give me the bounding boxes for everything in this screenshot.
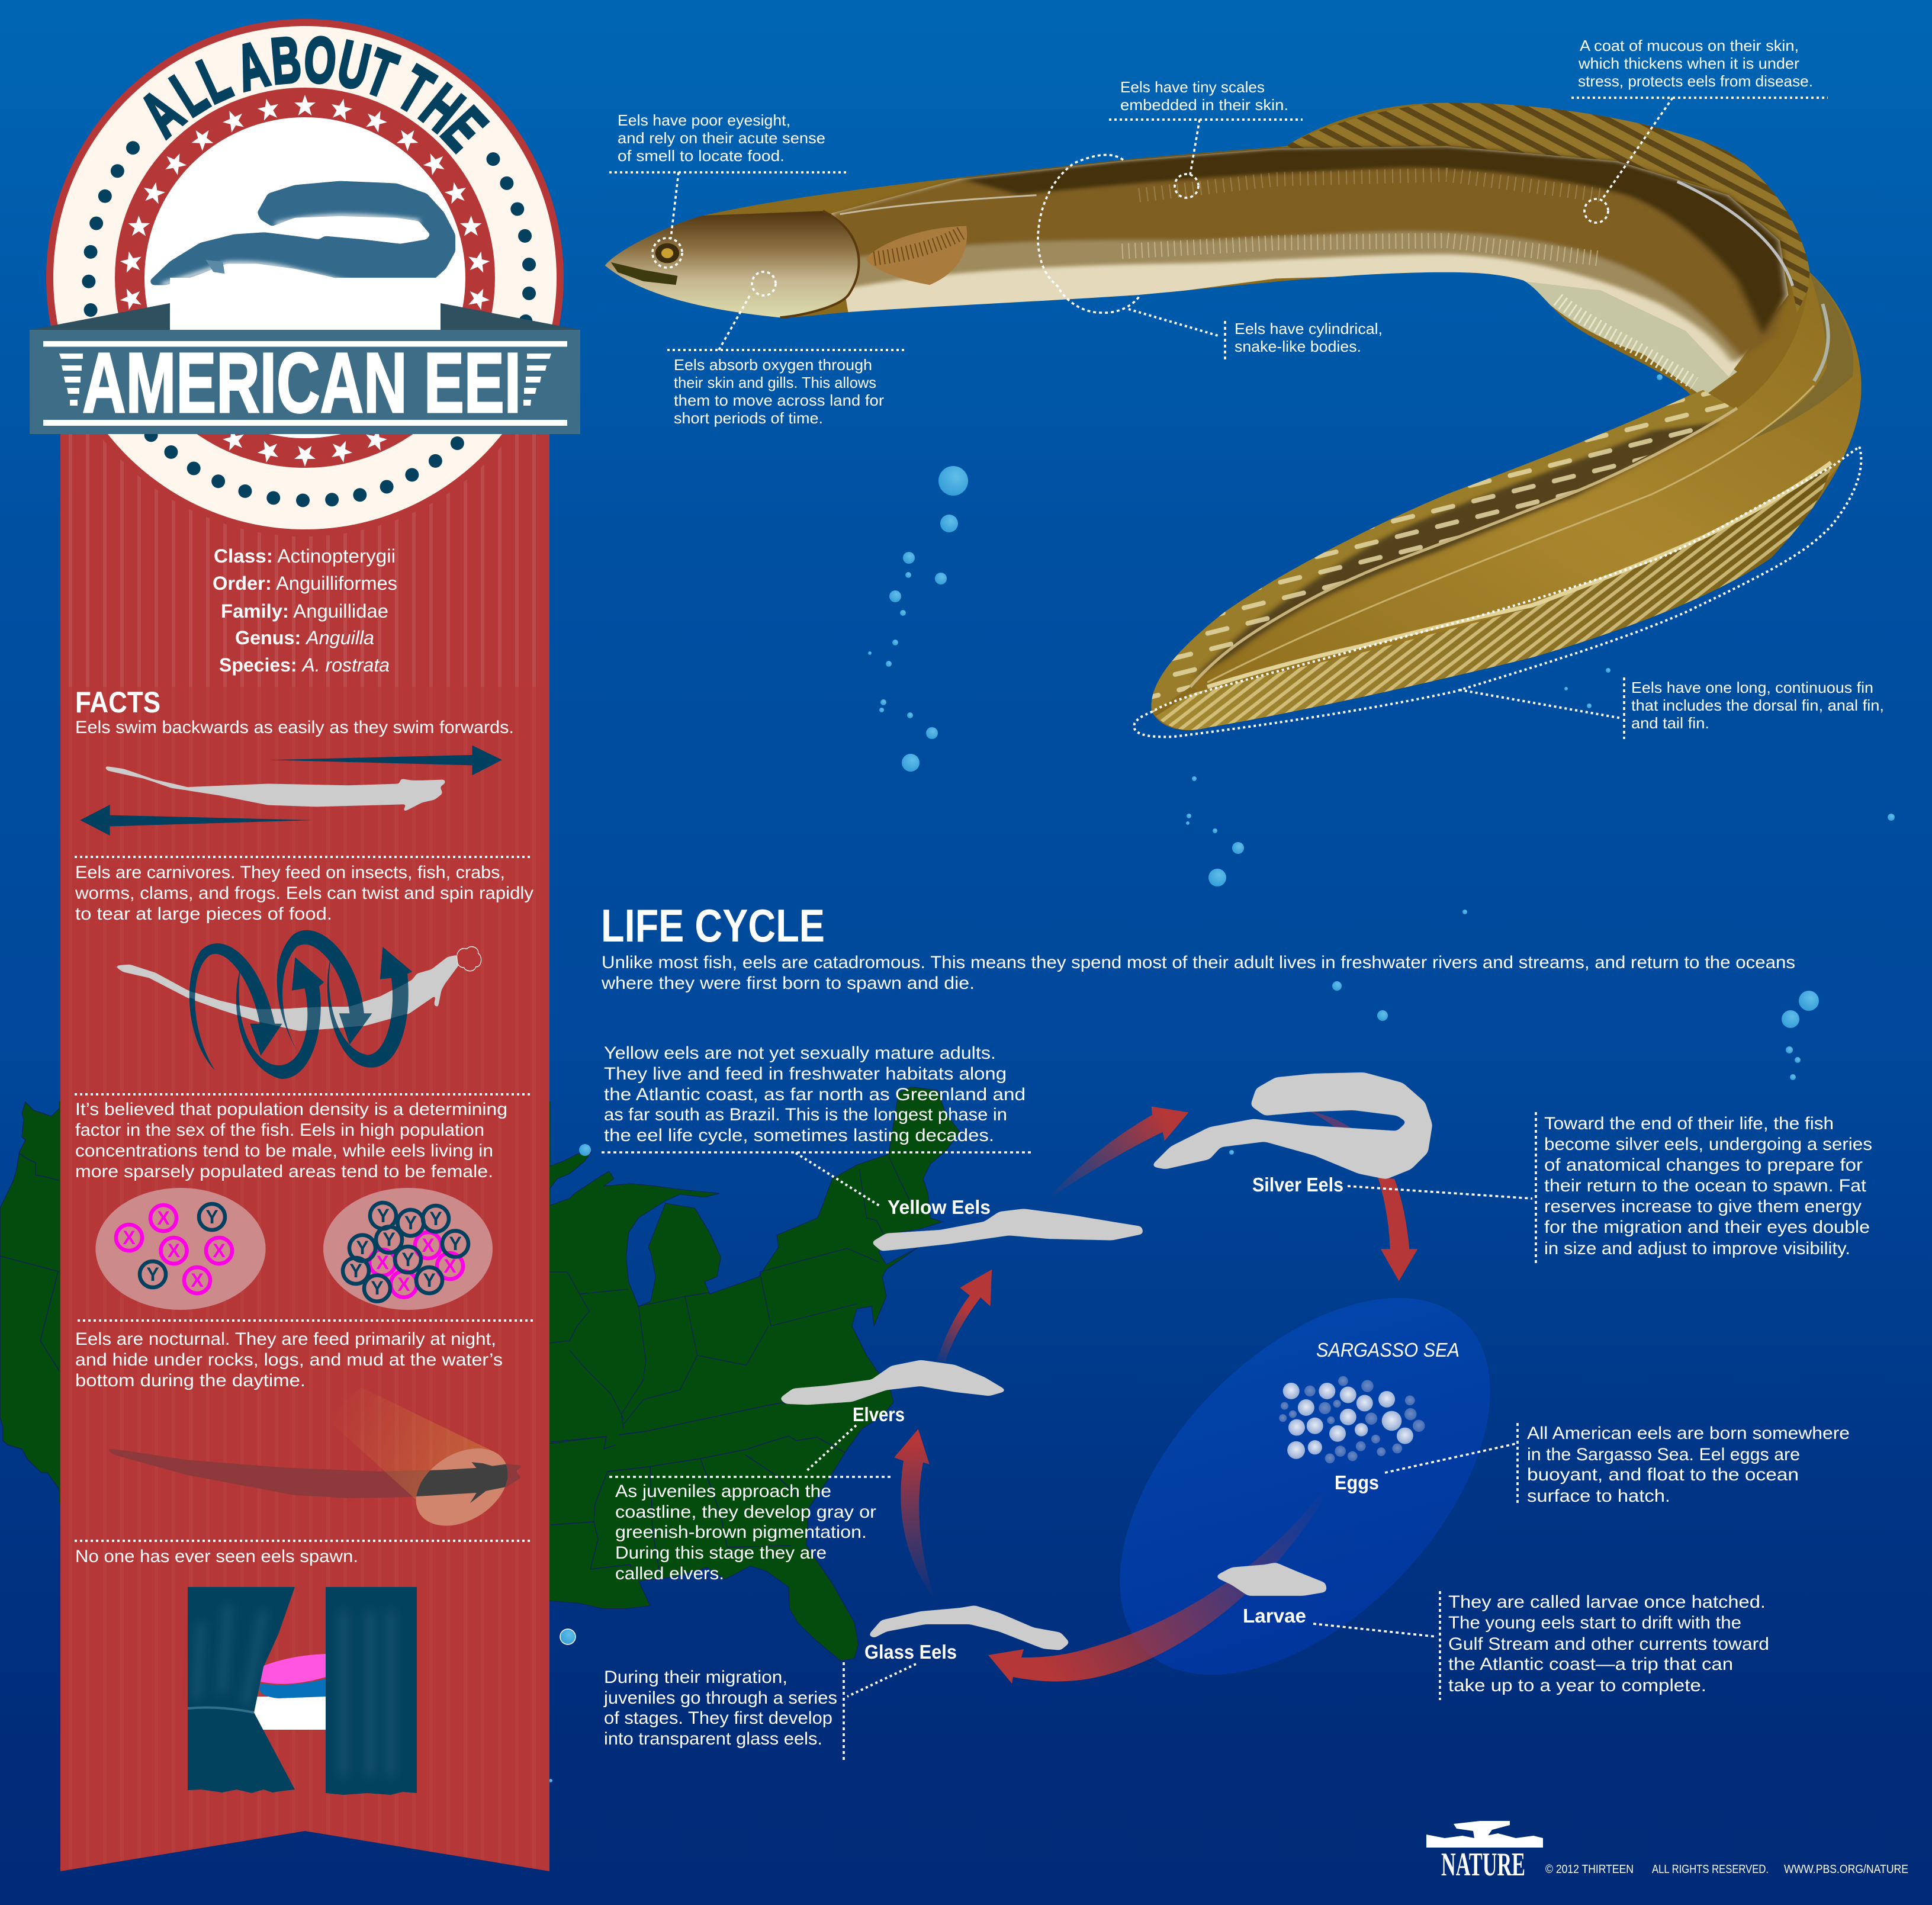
fact 3 chart: high density population: Y xyxy=(349,1260,362,1281)
fact 3 chart: low density population: X xyxy=(191,1270,204,1291)
stage note: silver eels: of anatomical changes to prepare for xyxy=(1544,1155,1863,1175)
taxonomy list: Order: Anguilliformes xyxy=(213,573,397,594)
callout: eyesight: Eels have poor eyesight, xyxy=(618,111,790,129)
stage note: elvers: Elvers xyxy=(853,1403,905,1425)
life cycle intro: Unlike most fish, eels are catadromous. This means they spend most of their adult lives in freshwater rivers and streams, and return to the oceans xyxy=(602,953,1795,972)
stage note: larvae: Gulf Stream and other currents toward xyxy=(1448,1634,1769,1654)
callout: mucous: stress, protects eels from disease. xyxy=(1578,72,1813,90)
title arc: all about the: T xyxy=(357,36,406,112)
fact 5 illustration: curtains hiding spawning eels xyxy=(188,1587,417,1795)
title arc: all about the: T xyxy=(387,53,444,127)
fact 2 text xyxy=(75,863,533,924)
silver eel and larvae silhouettes xyxy=(1152,1073,1432,1595)
fact 3 chart: high density population: X xyxy=(443,1255,457,1277)
dot ring xyxy=(82,141,536,507)
callout: cylindrical body xyxy=(1038,155,1383,361)
title arc: all about the: A xyxy=(229,28,275,105)
callout: eyesight: of smell to locate food. xyxy=(618,147,785,165)
stage note: yellow eels xyxy=(602,1043,1033,1218)
stage note: eggs: in the Sargasso Sea. Eel eggs are xyxy=(1527,1445,1800,1464)
fact 3 chart: high density population: Y xyxy=(371,1277,384,1299)
fact 3 chart: low density population: X xyxy=(157,1207,170,1229)
callout: oxygen: short periods of time. xyxy=(674,409,823,427)
taxonomy list: Genus: Anguilla xyxy=(235,627,374,648)
stage note: larvae: They are called larvae once hatched. xyxy=(1448,1592,1766,1612)
stage note: silver eels: become silver eels, undergoing a series xyxy=(1544,1135,1872,1154)
stage note: larvae: The young eels start to drift with the xyxy=(1448,1613,1741,1633)
callout: oxygen: them to move across land for xyxy=(674,391,884,409)
stage note: eggs: All American eels are born somewhere xyxy=(1527,1424,1850,1443)
title arc: all about the: A xyxy=(128,77,197,150)
stage note: larvae: take up to a year to complete. xyxy=(1448,1676,1706,1695)
stage note: glass eels xyxy=(603,1641,957,1762)
fact 3 chart: low density population: X xyxy=(213,1240,226,1261)
yellow eel, elver and glass eel silhouettes xyxy=(780,1209,1143,1650)
fact 3 text: more sparsely populated areas tend to be female. xyxy=(75,1162,493,1181)
stage note: larvae: Larvae xyxy=(1243,1605,1306,1627)
callout: oxygen: Eels absorb oxygen through xyxy=(674,356,872,374)
taxonomy list: Species: A. rostrata xyxy=(219,654,390,676)
fact 1 illustration: eel with two arrows xyxy=(80,746,502,836)
air bubbles xyxy=(549,374,1895,1782)
fact 3 chart: high density population: Y xyxy=(429,1208,442,1229)
fact 3 text: It’s believed that population density is a determining xyxy=(75,1100,507,1119)
callout: scales xyxy=(1109,78,1303,198)
stage note: yellow eels: Yellow Eels xyxy=(888,1196,991,1218)
fact 3 chart: low density population: Y xyxy=(205,1206,218,1228)
banner: american eel xyxy=(30,330,580,434)
facts heading: FACTS xyxy=(75,686,160,719)
title arc: all about the: L xyxy=(160,56,219,130)
stage note: elvers: coastline, they develop gray or xyxy=(615,1502,876,1522)
footer credits: © 2012 THIRTEEN xyxy=(1545,1863,1634,1876)
fact 3 chart: high density population xyxy=(323,1188,493,1310)
red ribbon panel xyxy=(60,415,549,1871)
stage note: silver eels: for the migration and their eyes double xyxy=(1544,1217,1870,1237)
fact 3 chart: high density population: X xyxy=(397,1274,410,1295)
speed lines xyxy=(59,354,551,406)
footer credits: ALL RIGHTS RESERVED. xyxy=(1652,1863,1769,1876)
fact 2 text: Eels are carnivores. They feed on insects, fish, crabs, xyxy=(75,863,505,882)
stage note: larvae xyxy=(1243,1591,1769,1700)
callout: eyesight xyxy=(609,111,847,268)
fact 3 text xyxy=(75,1100,507,1181)
stage note: larvae: the Atlantic coast—a trip that can xyxy=(1448,1655,1733,1674)
stage note: silver eels: in size and adjust to improve visibility. xyxy=(1544,1239,1850,1258)
callout: continuous fin: and tail fin. xyxy=(1631,714,1709,732)
footer credits xyxy=(1545,1863,1908,1876)
stage note: yellow eels: the eel life cycle, sometimes lasting decades. xyxy=(604,1126,994,1145)
stage note: eggs: buoyant, and float to the ocean xyxy=(1527,1465,1799,1485)
fact 5 text: No one has ever seen eels spawn. xyxy=(75,1547,358,1566)
callout: mucous: A coat of mucous on their skin, xyxy=(1580,37,1799,54)
stage note: eggs xyxy=(1335,1423,1850,1506)
fact 2 illustration: spinning eel xyxy=(114,930,481,1079)
stage note: glass eels: During their migration, xyxy=(604,1668,787,1687)
stage note: eggs: surface to hatch. xyxy=(1527,1486,1670,1506)
stage note: silver eels xyxy=(1252,1112,1872,1264)
title arc: all about the: O xyxy=(302,24,338,98)
stage note: glass eels: into transparent glass eels. xyxy=(604,1729,822,1749)
fact 3 chart: high density population: Y xyxy=(356,1237,369,1258)
fact 3 text: concentrations tend to be male, while eels living in xyxy=(75,1141,493,1161)
stage note: glass eels: Glass Eels xyxy=(864,1641,957,1663)
callout: continuous fin: Eels have one long, continuous fin xyxy=(1631,679,1873,696)
eggs cluster xyxy=(1279,1376,1425,1463)
banner fold shadows xyxy=(30,303,580,330)
stage note: elvers: As juveniles approach the xyxy=(615,1482,831,1501)
stage note: elvers xyxy=(609,1403,905,1583)
stage note: elvers: called elvers. xyxy=(615,1564,724,1583)
cycle arrows on the map side xyxy=(894,1107,1189,1601)
title arc: all about the: B xyxy=(268,24,304,98)
callout: oxygen: their skin and gills. This allows xyxy=(674,374,876,391)
callout: mucous xyxy=(1571,37,1828,223)
taxonomy list: Class: Actinopterygii xyxy=(214,545,396,567)
stage note: glass eels: of stages. They first develop xyxy=(604,1708,832,1728)
badge eel illustration xyxy=(150,181,455,291)
fact 1 text: Eels swim backwards as easily as they swim forwards. xyxy=(75,718,514,737)
callout: oxygen xyxy=(667,272,906,427)
title arc: all about the: L xyxy=(188,42,241,117)
stage note: yellow eels: They live and feed in freshwater habitats along xyxy=(604,1064,1007,1084)
title arc: all about the xyxy=(128,24,500,163)
taxonomy list: Family: Anguillidae xyxy=(221,600,388,622)
map: eastern United States xyxy=(0,1087,960,1660)
callout: continuous fin xyxy=(1134,446,1884,739)
fact 4 text: bottom during the daytime. xyxy=(75,1371,306,1390)
callout: eyesight: and rely on their acute sense xyxy=(618,129,825,147)
fact 4 text xyxy=(75,1329,503,1390)
fact 2 text: worms, clams, and frogs. Eels can twist and spin rapidly xyxy=(75,884,533,903)
callout: cylindrical body: Eels have cylindrical, xyxy=(1235,320,1383,338)
fact 3 chart: high density population: Y xyxy=(423,1270,436,1291)
fact 3 chart: high density population: Y xyxy=(449,1233,462,1254)
life cycle heading: LIFE CYCLE xyxy=(601,900,825,952)
sargasso sea ellipse xyxy=(1051,1230,1559,1743)
fact 3 chart: low density population: X xyxy=(168,1240,181,1261)
stage note: eggs: Eggs xyxy=(1335,1472,1379,1493)
stage note: silver eels: reserves increase to give them energy xyxy=(1544,1197,1862,1216)
big illustrated eel xyxy=(605,100,1865,730)
fact 4 illustration: eel under spotlight xyxy=(106,1387,525,1541)
banner: american eel: AMERICAN EEI xyxy=(82,335,521,431)
callout: scales: embedded in their skin. xyxy=(1120,96,1288,114)
fact 3 chart: low density population xyxy=(95,1188,266,1310)
nature logo xyxy=(1426,1821,1543,1883)
fact 4 text: Eels are nocturnal. They are feed primarily at night, xyxy=(75,1329,496,1349)
callout: scales: Eels have tiny scales xyxy=(1120,78,1265,96)
callout: mucous: which thickens when it is under xyxy=(1578,54,1799,72)
title arc: all about the: H xyxy=(408,72,476,146)
callout: continuous fin: that includes the dorsal fin, anal fin, xyxy=(1631,696,1884,714)
stage note: silver eels: their return to the ocean to spawn. Fat xyxy=(1544,1176,1867,1196)
fact 3 chart: high density population: X xyxy=(376,1252,389,1273)
star ring xyxy=(119,95,491,467)
title arc: all about the: U xyxy=(332,27,376,104)
cycle arrow: silver eels to eggs xyxy=(1309,1111,1417,1281)
life cycle intro xyxy=(601,953,1795,993)
fact 3 chart: high density population: Y xyxy=(404,1212,417,1233)
stage note: yellow eels: the Atlantic coast, as far north as Greenland and xyxy=(604,1085,1026,1104)
fact 3 text: factor in the sex of the fish. Eels in high population xyxy=(75,1120,484,1140)
footer credits: WWW.PBS.ORG/NATURE xyxy=(1784,1863,1908,1876)
fact 4 text: and hide under rocks, logs, and mud at the water’s xyxy=(75,1350,503,1370)
stage note: silver eels: Toward the end of their life, the fish xyxy=(1544,1114,1834,1133)
title arc: all about the: E xyxy=(429,95,500,163)
white panel behind banner xyxy=(170,278,441,330)
fact 3 chart: low density population: Y xyxy=(146,1264,159,1285)
stage note: elvers: During this stage they are xyxy=(615,1543,827,1563)
sargasso sea label: SARGASSO SEA xyxy=(1316,1339,1460,1361)
fact 3 chart: high density population: X xyxy=(422,1235,435,1256)
cycle arrow: larvae to glass eels xyxy=(988,1483,1331,1684)
nature logo: NATURE xyxy=(1441,1846,1525,1883)
fact 2 text: to tear at large pieces of food. xyxy=(75,904,332,924)
fact 3 chart: high density population: Y xyxy=(382,1229,396,1250)
stage note: yellow eels: Yellow eels are not yet sexually mature adults. xyxy=(604,1043,996,1063)
stage note: elvers: greenish-brown pigmentation. xyxy=(615,1522,867,1542)
fact 3 chart: high density population: Y xyxy=(401,1249,414,1270)
fact 3 chart: high density population: Y xyxy=(377,1205,390,1226)
taxonomy list xyxy=(213,545,397,676)
stage note: yellow eels: as far south as Brazil. This is the longest phase in xyxy=(604,1105,1007,1125)
callout: cylindrical body: snake-like bodies. xyxy=(1235,338,1361,355)
life cycle intro: where they were first born to spawn and die. xyxy=(601,974,975,993)
badge roundel xyxy=(46,19,564,537)
stage note: glass eels: juveniles go through a series xyxy=(603,1688,837,1708)
stage note: silver eels: Silver Eels xyxy=(1252,1174,1343,1196)
fact 3 chart: low density population: X xyxy=(123,1227,136,1248)
